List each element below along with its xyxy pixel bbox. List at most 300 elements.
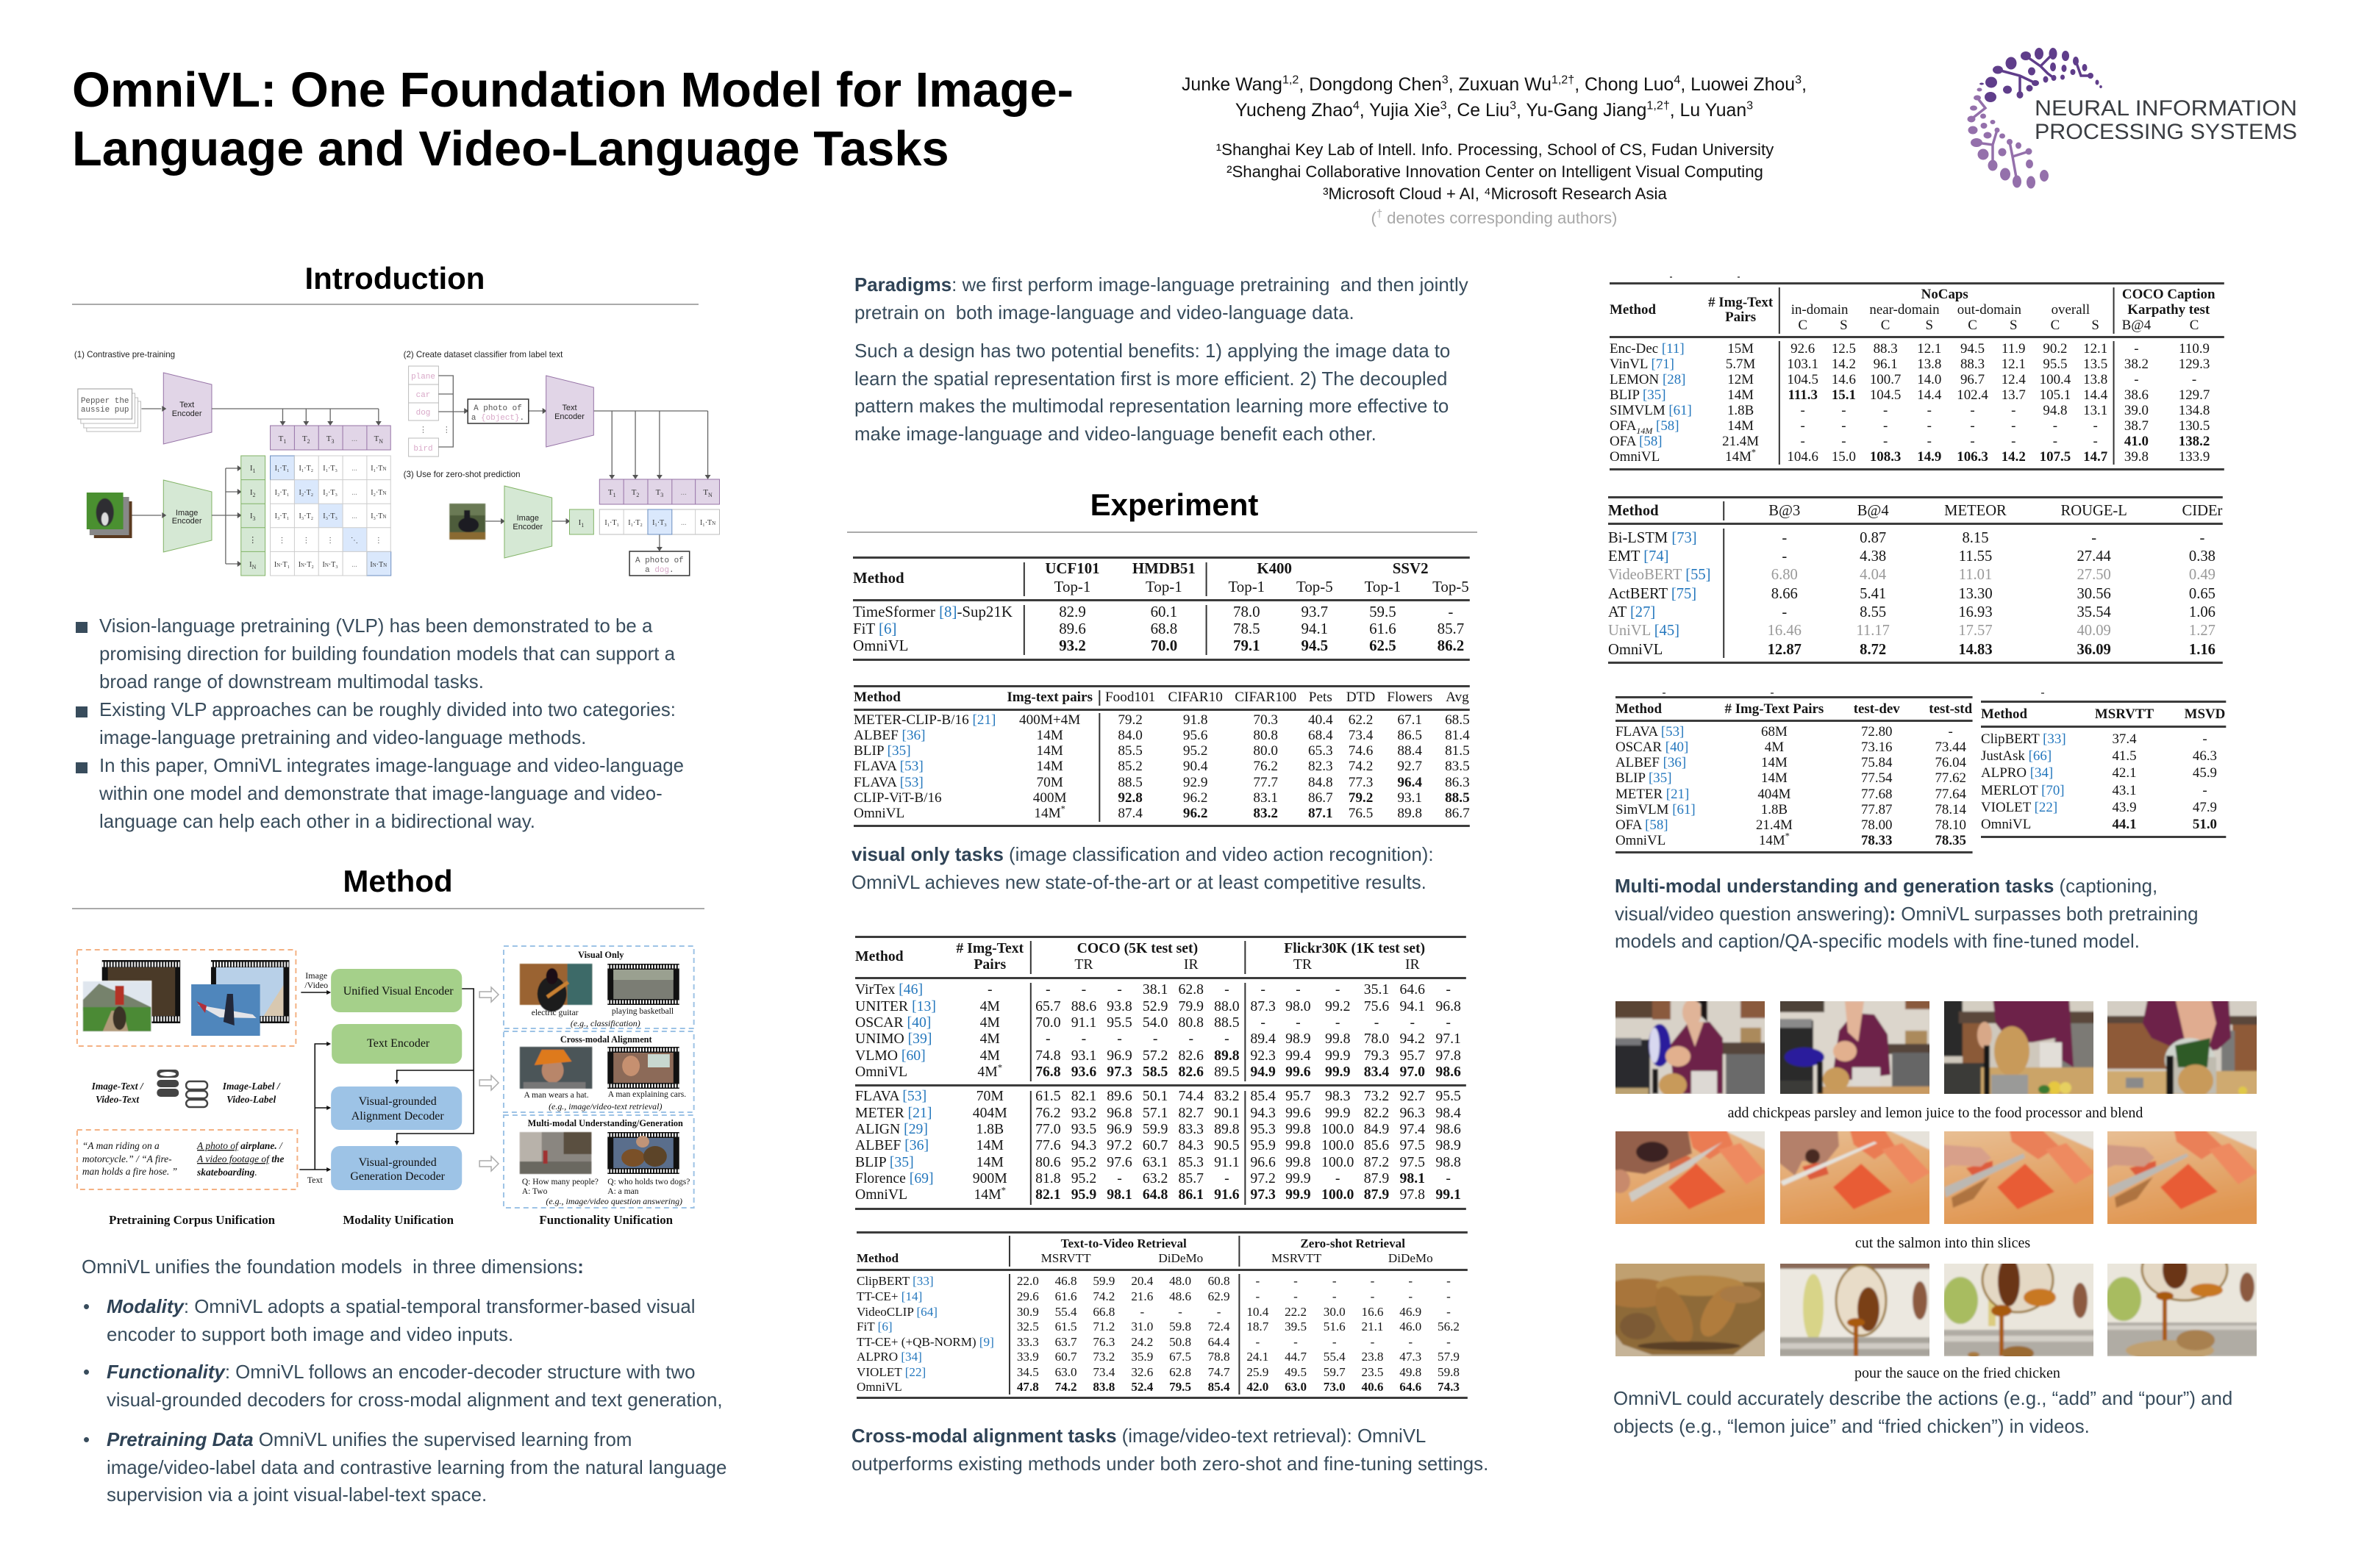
table: VQA: test-std	[1929, 701, 1972, 716]
table: video captioning: 0.65	[2189, 586, 2215, 602]
table: image-text retrieval: 87.9	[1364, 1170, 1389, 1186]
table: text-to-video retrieval: VideoCLIP [64]	[857, 1305, 938, 1319]
table: text-to-video retrieval: 63.7	[1055, 1335, 1077, 1349]
bullet: modality	[83, 1297, 696, 1345]
table: image captioning: -	[1970, 434, 1975, 449]
table: image classification: 96.4	[1397, 775, 1422, 790]
table: VQA: 14M	[1761, 770, 1788, 786]
table: VQA: OmniVL	[1615, 833, 1665, 848]
table: image-text retrieval: FLAVA [53]	[855, 1088, 926, 1104]
table: image classification: 70.3	[1253, 712, 1278, 728]
table: image-text retrieval: 96.8	[1435, 998, 1461, 1014]
authors: Junke Wang1,2, Dongdong Chen3, Zuxuan Wu1,2†, Chong Luo4, Luowei Zhou3,	[1182, 74, 1807, 95]
panel: multi-modal understanding: A: a man	[607, 1186, 639, 1196]
table: image-text retrieval: 96.9	[1107, 1121, 1132, 1137]
table: image-text retrieval: 95.5	[1435, 1088, 1461, 1104]
text: •	[83, 1362, 90, 1383]
table: VQA: 77.64	[1935, 787, 1966, 801]
table: text-to-video retrieval: 59.8	[1438, 1365, 1460, 1379]
text encoder 1: Text	[179, 401, 194, 409]
table: image captioning: 12.4	[2002, 372, 2026, 387]
table: video QA: 41.5	[2112, 748, 2137, 764]
prediction result box: A photo of	[635, 556, 684, 565]
table: image-text retrieval: 900M	[973, 1170, 1007, 1186]
table: video action recognition	[853, 556, 1470, 661]
table: text-to-video retrieval: Zero-shot Retrieval	[1300, 1236, 1405, 1250]
table: text-to-video retrieval: 57.9	[1438, 1350, 1460, 1364]
table: text-to-video retrieval: -	[1255, 1274, 1260, 1288]
table: VQA: 77.68	[1861, 787, 1892, 801]
table: text-to-video retrieval: 74.3	[1438, 1380, 1460, 1394]
table: video captioning: 8.72	[1860, 642, 1886, 658]
table: image captioning: 5.7M	[1726, 357, 1755, 372]
table: image-text retrieval: 99.9	[1325, 1105, 1350, 1121]
photos: sauce clip	[1615, 1264, 2257, 1356]
table: image-text retrieval: UNIMO [39]	[855, 1031, 932, 1047]
table: image captioning: Method	[1610, 302, 1656, 318]
table: image-text retrieval: Pairs	[974, 956, 1006, 973]
table: image-text retrieval: OSCAR [40]	[855, 1014, 931, 1031]
similarity matrix: I₂·T₁	[275, 489, 289, 497]
table: image-text retrieval: 79.9	[1179, 998, 1204, 1014]
table: image captioning: 100.7	[1870, 372, 1901, 387]
column labels: Pretraining Corpus Unification	[109, 1213, 276, 1227]
table: video action recognition: HMDB51	[1132, 559, 1196, 577]
table: image classification: 74.6	[1349, 743, 1373, 759]
table: image-text retrieval: 95.2	[1071, 1170, 1096, 1186]
table: image-text retrieval: 95.3	[1250, 1121, 1276, 1137]
table: image-text retrieval: 100.0	[1321, 1186, 1354, 1203]
table: image captioning: 133.9	[2179, 449, 2210, 465]
affiliations: ¹Shanghai Key Lab of Intell. Info. Processing, School of CS, Fudan University	[1216, 140, 1774, 159]
table: image-text retrieval: ALBEF [36]	[855, 1137, 929, 1153]
text: qualitative results: OmniVL could accurately describe the actions (e.g., “add” and “pour”) and	[1613, 1389, 2232, 1409]
table: image captioning: 12.1	[2083, 341, 2107, 357]
table: image captioning: 39.0	[2124, 403, 2149, 418]
table: text-to-video retrieval: 79.5	[1169, 1380, 1191, 1394]
table: image-text retrieval: 97.4	[1400, 1121, 1425, 1137]
table: image-text retrieval: -	[1224, 1170, 1229, 1186]
table: image-text retrieval: 99.4	[1285, 1048, 1311, 1064]
table: video captioning: 11.01	[1959, 567, 1992, 583]
table: image-text retrieval: 89.8	[1214, 1121, 1240, 1137]
table: video QA	[1981, 701, 2227, 838]
table: video captioning	[1608, 496, 2223, 664]
table: image captioning: 14.4	[2083, 387, 2107, 403]
token row 2: T2	[632, 488, 639, 498]
table: video captioning: B@4	[1857, 503, 1889, 519]
text: •	[83, 1430, 90, 1450]
label: zero-shot prediction: (3) Use for zero-shot prediction	[404, 470, 521, 479]
table: image captioning: 38.7	[2124, 418, 2149, 434]
table: image-text retrieval: -	[1296, 1014, 1301, 1031]
table: image classification: Pets	[1309, 690, 1332, 705]
table: image-text retrieval: 98.6	[1435, 1121, 1461, 1137]
table: image classification: Avg	[1446, 690, 1469, 705]
table: video action recognition: 93.7	[1302, 603, 1328, 620]
table: video captioning: 36.09	[2077, 642, 2111, 658]
table: text-to-video retrieval: 83.8	[1093, 1380, 1115, 1394]
table: image classification: DTD	[1346, 690, 1375, 705]
table: video action recognition: 79.1	[1233, 637, 1260, 654]
table: text-to-video retrieval: 32.5	[1017, 1320, 1039, 1333]
table: image-text retrieval: 52.9	[1143, 998, 1168, 1014]
table: image-text retrieval: UNITER [13]	[855, 998, 936, 1014]
table: image captioning: 90.2	[2043, 341, 2067, 357]
table: image captioning: near-domain	[1869, 302, 1940, 318]
table: image-text retrieval: 80.6	[1035, 1154, 1061, 1170]
table: image-text retrieval: 76.2	[1035, 1105, 1061, 1121]
table: text-to-video retrieval: 51.6	[1324, 1320, 1346, 1333]
table: text-to-video retrieval: -	[1371, 1274, 1374, 1288]
corpus box: text: motorcycle.” / “A fire-	[82, 1153, 172, 1164]
text: visual only tasks	[851, 845, 1434, 892]
table: image-text retrieval: 100.0	[1321, 1121, 1354, 1137]
table: video action recognition: K400	[1257, 559, 1292, 577]
text: cross-modal alignment tasks: outperforms existing methods under both zero-shot and fine-tuning settings.	[851, 1454, 1488, 1475]
table: video QA: MSRVTT	[2095, 706, 2154, 722]
table: video action recognition: 86.2	[1438, 637, 1464, 654]
table: image-text retrieval: 57.1	[1143, 1105, 1168, 1121]
table: video action recognition: Top-1	[1365, 578, 1401, 595]
table: image-text retrieval: 404M	[973, 1105, 1007, 1121]
text encoder 1: Encoder	[172, 409, 202, 418]
table: text-to-video retrieval: -	[1217, 1305, 1221, 1319]
arrows: contrastive connections	[132, 406, 382, 567]
panel: cross-modal alignment: (e.g., image/video-text retrieval)	[549, 1101, 662, 1111]
table: image-text retrieval: 99.9	[1325, 1048, 1350, 1064]
table: image-text retrieval: 85.4	[1250, 1088, 1276, 1104]
table: image-text retrieval: 57.2	[1143, 1048, 1168, 1064]
table: image-text retrieval: 73.2	[1364, 1088, 1389, 1104]
table: image-text retrieval: 85.6	[1364, 1137, 1389, 1153]
table: text-to-video retrieval: 32.6	[1131, 1365, 1153, 1379]
table: image classification: 91.8	[1183, 712, 1207, 728]
table: video action recognition: 85.7	[1438, 620, 1464, 637]
text: paradigms	[854, 275, 1468, 323]
table: image captioning: overall	[2052, 302, 2090, 318]
table: image-text retrieval: 93.6	[1071, 1064, 1096, 1080]
table: image-text retrieval: TR	[1293, 956, 1312, 973]
table: video captioning: METEOR	[1944, 503, 2007, 519]
stack: text captions: Pepper the	[81, 397, 129, 406]
table: image captioning: 92.6	[1790, 341, 1815, 357]
table: image captioning: VinVL [71]	[1610, 357, 1674, 372]
table: video QA: -	[2202, 782, 2207, 798]
table: image captioning: 13.1	[2083, 403, 2107, 418]
table: image-text retrieval: 90.5	[1214, 1137, 1240, 1153]
module: text encoder: Text Encoder	[367, 1037, 430, 1050]
table: video captioning: CIDEr	[2182, 503, 2222, 519]
logo: neural information processing systems: PROCESSING SYSTEMS	[2035, 120, 2297, 144]
database icons with labels: Image-Label /	[222, 1081, 281, 1092]
table: image-text retrieval: 97.2	[1250, 1170, 1276, 1186]
table: text-to-video retrieval: 34.5	[1017, 1365, 1039, 1379]
table: image-text retrieval: 82.1	[1035, 1186, 1061, 1203]
module: generation decoder: Generation Decoder	[350, 1170, 446, 1183]
table: image-text retrieval: -	[1082, 1031, 1086, 1047]
table: text-to-video retrieval: 67.5	[1169, 1350, 1191, 1364]
table: image captioning: 14.9	[1917, 449, 1941, 465]
table: video action recognition: -	[1448, 603, 1453, 620]
similarity matrix: ...	[351, 489, 357, 497]
table: image captioning: 15.0	[1832, 449, 1856, 465]
table: image-text retrieval: METER [21]	[855, 1105, 932, 1121]
logo: neural information processing systems: NEURAL INFORMATION	[2035, 96, 2297, 121]
table: image-text retrieval: 70M	[976, 1088, 1004, 1104]
table: VQA: # Img-Text Pairs	[1725, 701, 1824, 716]
table: image-text retrieval: -	[1335, 981, 1340, 998]
table: image captioning: 129.7	[2179, 387, 2210, 403]
text: introduction bullets: image-language pretraining and video-language methods.	[99, 728, 586, 748]
table: image classification: 68.4	[1308, 728, 1333, 743]
photos: chickpeas clip	[1615, 1001, 2257, 1094]
table: text-to-video retrieval: 30.9	[1017, 1305, 1039, 1319]
prompt template box	[468, 399, 529, 423]
table: text-to-video retrieval: -	[1293, 1289, 1298, 1303]
table: text-to-video retrieval: -	[1293, 1274, 1298, 1288]
table: image-text retrieval: 84.3	[1179, 1137, 1204, 1153]
table: image classification: 67.1	[1397, 712, 1422, 728]
table: image captioning: 13.8	[2083, 372, 2107, 387]
corresponding author note: († denotes corresponding authors)	[1371, 209, 1617, 227]
token row 2: T1	[608, 488, 616, 498]
table: VQA	[1615, 696, 1973, 853]
table: text-to-video retrieval: FiT [6]	[857, 1320, 893, 1333]
table: image captioning: C	[2190, 318, 2199, 333]
table: image-text retrieval: -	[1046, 1031, 1051, 1047]
table: image-text retrieval: -	[1153, 1031, 1157, 1047]
table: image-text retrieval: -	[1446, 981, 1451, 998]
table: text-to-video retrieval: DiDeMo	[1388, 1251, 1433, 1265]
table: VQA: 68M	[1761, 723, 1788, 740]
similarity matrix: ⋮	[375, 537, 382, 545]
module: unified visual encoder	[331, 969, 462, 1012]
table: image captioning: -	[1841, 403, 1846, 418]
table: image captioning: Pairs	[1725, 309, 1756, 325]
table: image captioning: -	[1883, 434, 1888, 449]
table: VQA: test-dev	[1854, 701, 1900, 716]
arrows: text input routing	[299, 1042, 331, 1185]
table: video QA: 45.9	[2193, 765, 2217, 781]
table: video captioning: ActBERT [75]	[1608, 586, 1696, 602]
table: image classification: 68.5	[1445, 712, 1470, 728]
table: image captioning: -	[2192, 372, 2196, 387]
table: image-text retrieval: 93.5	[1071, 1121, 1096, 1137]
table: image-text retrieval: 98.1	[1107, 1186, 1132, 1203]
panel: multi-modal understanding: A: Two	[522, 1186, 548, 1196]
table: image-text retrieval: 91.1	[1071, 1014, 1096, 1031]
text: qualitative results	[1613, 1389, 2232, 1436]
corpus box: text: skateboarding.	[196, 1167, 257, 1178]
table: text-to-video retrieval: -	[1446, 1305, 1451, 1319]
table: image-text retrieval: 97.8	[1400, 1186, 1425, 1203]
table: image-text retrieval: 95.9	[1071, 1186, 1096, 1203]
table: text-to-video retrieval: 18.7	[1246, 1320, 1268, 1333]
table: image-text retrieval: 83.3	[1179, 1121, 1204, 1137]
table: video captioning: 30.56	[2077, 586, 2111, 602]
table: image-text retrieval: 64.6	[1400, 981, 1425, 998]
table: image-text retrieval	[855, 936, 1466, 1210]
table: image-text retrieval: 100.0	[1321, 1137, 1354, 1153]
table: image-text retrieval: 97.5	[1400, 1137, 1425, 1153]
table: image classification: Flowers	[1387, 690, 1432, 705]
table: image-text retrieval: -	[1296, 981, 1301, 998]
table: video QA: OmniVL	[1981, 817, 2031, 832]
table: image-text retrieval: 58.5	[1143, 1064, 1168, 1080]
text: multi-modal understanding tasks	[1615, 876, 2198, 952]
table: image-text retrieval: 89.5	[1214, 1064, 1240, 1080]
table: video captioning: OmniVL	[1608, 642, 1663, 658]
table: video captioning: UniVL [45]	[1608, 623, 1679, 639]
similarity matrix: ⋮	[302, 537, 310, 545]
table: text-to-video retrieval: VIOLET [22]	[857, 1365, 926, 1379]
text: paradigms: pretrain on both image-language and video-language data.	[854, 303, 1354, 323]
image token column: I2	[250, 488, 256, 498]
table: image classification: FLAVA [53]	[854, 759, 924, 774]
table: image-text retrieval: 84.9	[1364, 1121, 1389, 1137]
label: contrastive pre-training: (1) Contrastive pre-training	[74, 351, 175, 359]
table: text-to-video retrieval: -	[1408, 1274, 1413, 1288]
table: text-to-video retrieval: 73.4	[1093, 1365, 1115, 1379]
table: image-text retrieval: 80.8	[1179, 1014, 1204, 1031]
table: image captioning: 14M	[1727, 418, 1754, 434]
table: image-text retrieval: 38.1	[1143, 981, 1168, 998]
table: text-to-video retrieval: 48.0	[1169, 1274, 1191, 1288]
image token column: IN	[249, 560, 257, 570]
similarity matrix: I₃·T₂	[299, 512, 313, 520]
table: text-to-video retrieval: 44.7	[1285, 1350, 1307, 1364]
prediction row: I1	[579, 518, 584, 529]
table: image-text retrieval: 54.0	[1143, 1014, 1168, 1031]
table: image classification: 92.8	[1118, 790, 1143, 806]
table: image-text retrieval: 94.2	[1400, 1031, 1425, 1047]
table: image-text retrieval: 4M	[980, 1031, 1000, 1047]
table: image classification: 76.5	[1349, 806, 1373, 821]
table: VQA: BLIP [35]	[1615, 770, 1671, 786]
table: video QA: 42.1	[2112, 765, 2137, 781]
similarity matrix: I₂·T₂	[299, 489, 313, 497]
table: text-to-video retrieval: 49.8	[1399, 1365, 1421, 1379]
table: image-text retrieval: 61.5	[1035, 1088, 1061, 1104]
table: video captioning: 8.15	[1962, 530, 1988, 546]
table: image-text retrieval: 93.2	[1071, 1105, 1096, 1121]
table: video action recognition: Top-5	[1432, 578, 1469, 595]
table: image-text retrieval: 99.1	[1435, 1186, 1461, 1203]
table: text-to-video retrieval: 48.6	[1169, 1289, 1191, 1303]
text encoder 1	[163, 373, 212, 444]
arrow: image/video input: /Video	[304, 980, 328, 990]
table: image captioning: 88.3	[1874, 341, 1898, 357]
table: image-text retrieval: 77.6	[1035, 1137, 1061, 1153]
table: video captioning: 40.09	[2077, 623, 2111, 639]
table: text-to-video retrieval: 61.5	[1055, 1320, 1077, 1333]
table: text-to-video retrieval: -	[1446, 1274, 1451, 1288]
table: text-to-video retrieval: MSRVTT	[1041, 1251, 1091, 1265]
table: VQA: 77.54	[1861, 770, 1892, 786]
table: text-to-video retrieval: 59.8	[1169, 1320, 1191, 1333]
text: introduction bullets: broad range of downstream multimodal tasks.	[99, 672, 484, 692]
heading: introduction: Introduction	[305, 261, 485, 296]
table: VQA: ALBEF [36]	[1615, 755, 1686, 770]
table: image-text retrieval: -	[1082, 981, 1086, 998]
table: video captioning: -	[1782, 548, 1787, 565]
table: image captioning: 14.2	[1832, 357, 1856, 372]
similarity matrix: ...	[351, 561, 357, 569]
table: image captioning: Karpathy test	[2127, 302, 2210, 318]
table: image captioning: 12.1	[2002, 357, 2026, 372]
bullet: pretraining data: image/video-label data and contrastive learning from the natural language	[107, 1457, 726, 1478]
similarity matrix: I₃·T₁	[275, 512, 289, 520]
table: text-to-video retrieval: 76.3	[1093, 1335, 1115, 1349]
text: visual only tasks: visual only tasks (image classification and video action recognition):	[851, 845, 1434, 865]
table: VQA: 78.00	[1861, 817, 1892, 833]
table: image-text retrieval: 97.6	[1107, 1154, 1132, 1170]
table: image-text retrieval: 92.7	[1400, 1088, 1425, 1104]
logo: neural information processing systems	[1968, 48, 2297, 188]
text: design benefits	[854, 341, 1450, 444]
table: image captioning: 12.5	[1832, 341, 1856, 357]
table: image-text retrieval: IR	[1184, 956, 1199, 973]
title	[72, 63, 1074, 176]
prediction row: I₁·T₃	[652, 519, 667, 527]
table: text-to-video retrieval: 74.2	[1093, 1289, 1115, 1303]
table: image-text retrieval: Florence [69]	[855, 1170, 934, 1186]
table: text-to-video retrieval: -	[1332, 1274, 1337, 1288]
table: image captioning	[1610, 282, 2224, 470]
table: video captioning: -	[1782, 530, 1787, 546]
table: text-to-video retrieval: 22.0	[1017, 1274, 1039, 1288]
table: image classification: CIFAR100	[1235, 690, 1296, 705]
table: video action recognition: 60.1	[1151, 603, 1177, 620]
module: generation decoder: Visual-grounded	[359, 1156, 437, 1169]
authors: Yucheng Zhao4, Yujia Xie3, Ce Liu3, Yu-Gang Jiang1,2†, Lu Yuan3	[1235, 99, 1753, 121]
table: image-text retrieval: 93.8	[1107, 998, 1132, 1014]
table: image-text retrieval: 85.3	[1179, 1154, 1204, 1170]
affiliations	[1216, 140, 1774, 203]
table: image-text retrieval: 99.8	[1285, 1121, 1311, 1137]
table: text-to-video retrieval: ClipBERT [33]	[857, 1274, 934, 1288]
table: image-text retrieval: 95.9	[1250, 1137, 1276, 1153]
table: video action recognition: OmniVL	[853, 637, 908, 654]
table: image captioning: 108.3	[1870, 449, 1901, 465]
table: text-to-video retrieval: 73.2	[1093, 1350, 1115, 1364]
table: image-text retrieval: 93.1	[1071, 1048, 1096, 1064]
table: image captioning: 94.8	[2043, 403, 2067, 418]
text: multi-modal understanding tasks: models and caption/QA-specific models with fine-tuned model.	[1615, 931, 2140, 952]
table: image-text retrieval: 99.8	[1285, 1154, 1311, 1170]
table: image captioning: 13.8	[1917, 357, 1941, 372]
table: image classification: 86.7	[1445, 806, 1470, 821]
image encoder 1: Image	[176, 509, 198, 518]
table: image captioning: 11.9	[2002, 341, 2025, 357]
similarity matrix: ⋮	[279, 537, 285, 545]
table: video QA: JustAsk [66]	[1981, 748, 2052, 764]
table: text-to-video retrieval: -	[1140, 1305, 1144, 1319]
table: image classification: 95.2	[1183, 743, 1207, 759]
table: image classification: 86.7	[1308, 790, 1333, 806]
prediction result box: a dog.	[645, 566, 674, 575]
table: image-text retrieval: 98.9	[1285, 1031, 1311, 1047]
panel: multi-modal understanding: Q: who holds two dogs?	[607, 1177, 690, 1186]
table: text-to-video retrieval: 21.6	[1131, 1289, 1153, 1303]
table: image captioning: 95.5	[2043, 357, 2067, 372]
table: VQA: 78.10	[1935, 817, 1966, 833]
table: image-text retrieval: 86.1	[1179, 1186, 1204, 1203]
table: text-to-video retrieval: 62.9	[1208, 1289, 1230, 1303]
table: image captioning: C	[1968, 318, 1977, 333]
table: video captioning: EMT [74]	[1608, 548, 1669, 565]
